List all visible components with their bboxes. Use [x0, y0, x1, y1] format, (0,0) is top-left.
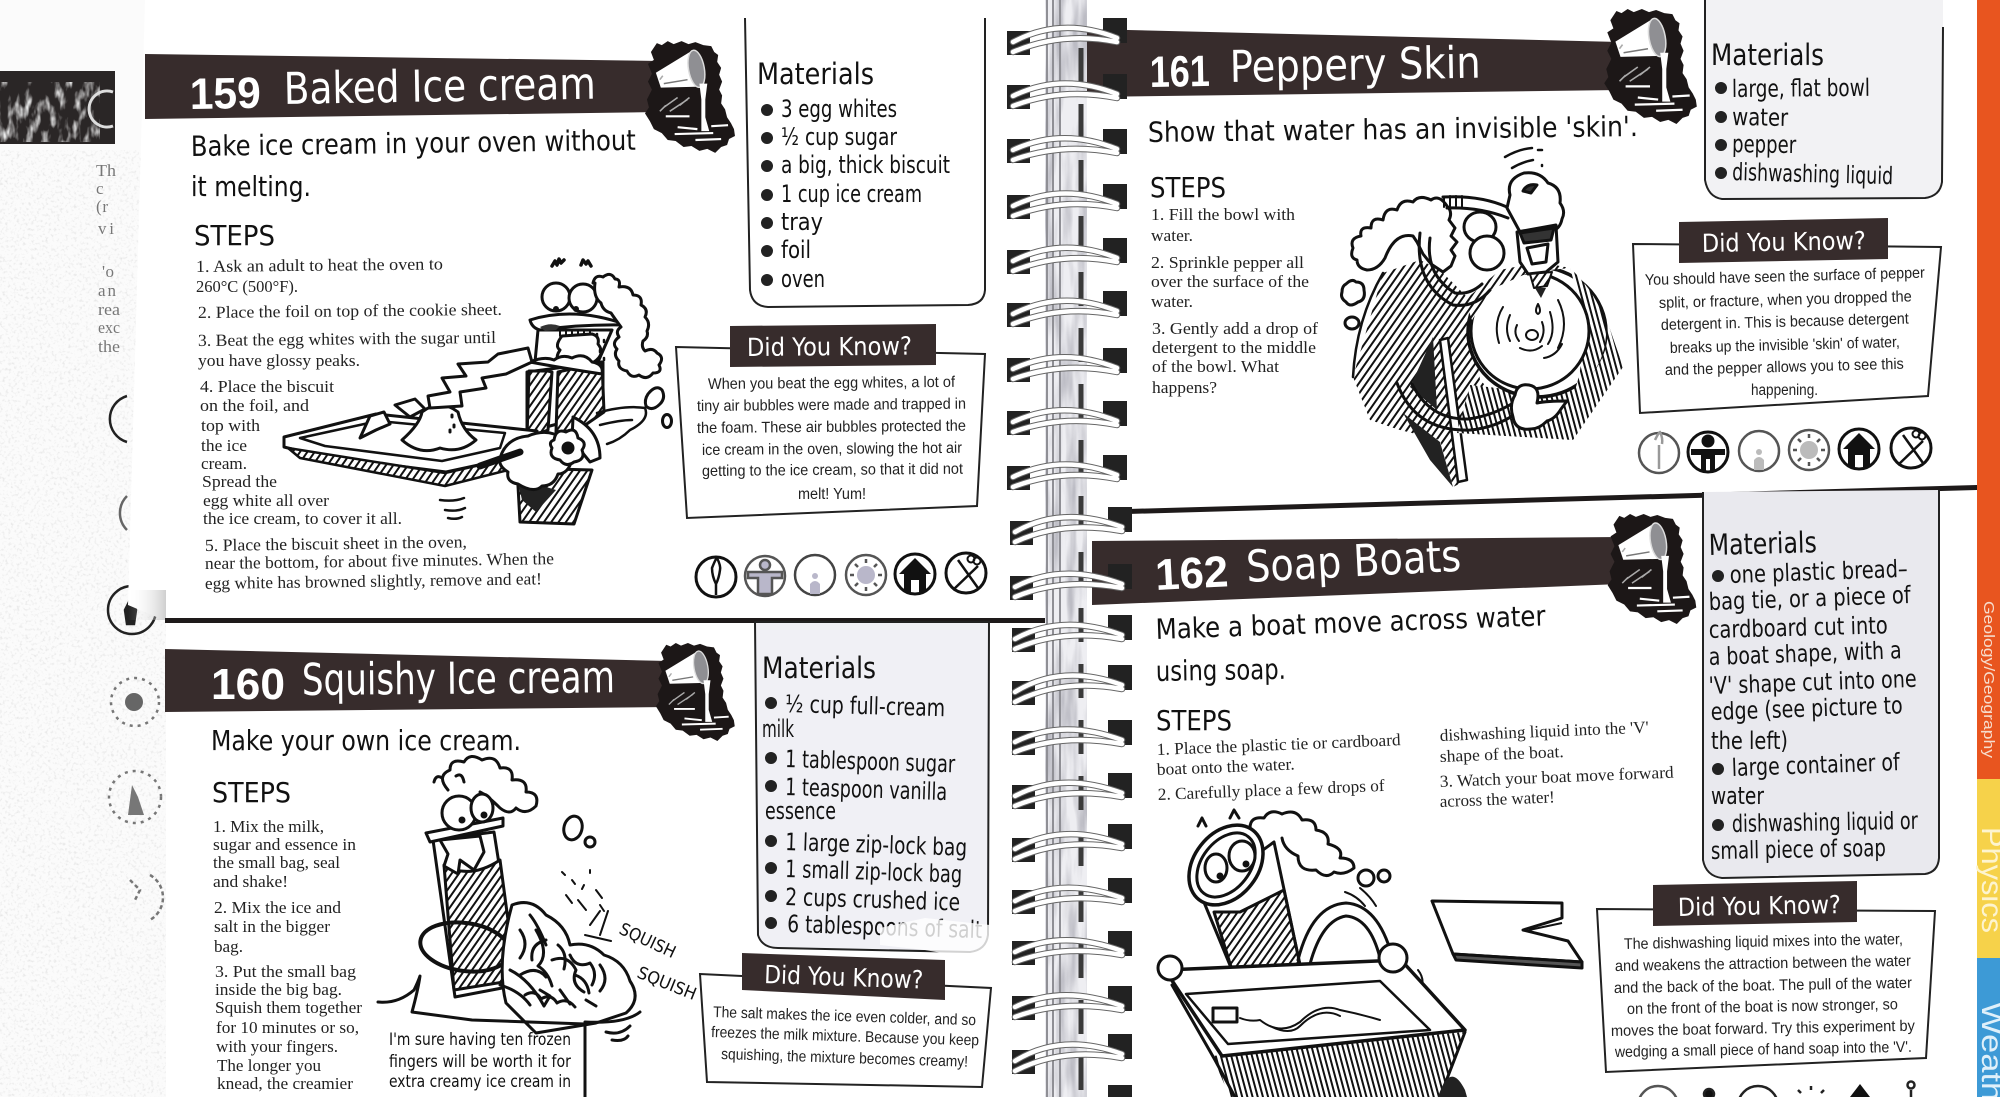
- did you know text 159: tiny air bubbles were made and trapped in: [697, 396, 966, 415]
- left page text fragments: an: [98, 281, 116, 300]
- bullets 161: [1715, 82, 1727, 179]
- materials list 162: 'V' shape cut into one: [1708, 665, 1917, 700]
- icon: sun: [846, 555, 886, 595]
- materials list 159: [781, 95, 950, 293]
- steps text 161: water.: [1151, 292, 1193, 311]
- materials list 159: ½ cup sugar: [781, 123, 897, 151]
- materials list 160: 2 cups crushed ice: [785, 883, 961, 916]
- title 162: Soap Boats: [1245, 531, 1462, 593]
- steps text 159: 2. Place the foil on top of the cookie sheet.: [198, 300, 502, 322]
- title 159: Baked Ice cream: [283, 59, 596, 115]
- steps text 162: across the water!: [1439, 787, 1555, 811]
- left page text fragments: Th: [96, 161, 117, 180]
- materials box 162: [1703, 490, 1939, 878]
- materials list 160: ½ cup full-cream: [785, 690, 946, 722]
- icon: match: [1639, 432, 1679, 473]
- foam cloud: [1352, 197, 1457, 272]
- icon: pouring bucket 161: [1604, 9, 1697, 124]
- title 161: Peppery Skin: [1229, 38, 1481, 93]
- icon: scissors: [1891, 428, 1931, 468]
- icon: match: [696, 557, 736, 597]
- materials list 162: [1708, 555, 1918, 865]
- right punch tabs: [1103, 18, 1132, 1097]
- steps text 161: 3. Gently add a drop of: [1152, 319, 1318, 338]
- illustration: cardboard boat piece: [1432, 901, 1582, 968]
- heading band 161: [1086, 29, 1620, 97]
- did you know text 162: on the front of the boat is now stronger, so: [1627, 996, 1898, 1018]
- icon: child: [745, 556, 785, 596]
- left page text fragments: 'o: [102, 262, 114, 281]
- illustration: test tube holding baked ice cream tray: [284, 259, 672, 524]
- steps text 160: inside the big bag.: [215, 980, 342, 999]
- did you know 162: [1597, 881, 1935, 1072]
- left page icon column: [108, 396, 163, 920]
- tube lower: [517, 468, 592, 524]
- title 160: [211, 652, 615, 709]
- materials list 161: pepper: [1732, 130, 1796, 159]
- steps text 162: 1. Place the plastic tie or cardboard: [1156, 730, 1401, 759]
- steps text 161: [1151, 205, 1318, 397]
- title 162: [1154, 531, 1462, 600]
- rim and eyes: [542, 283, 570, 311]
- did you know text 159: When you beat the egg whites, a lot of: [708, 374, 956, 393]
- bullets 162: [1712, 570, 1724, 831]
- ice cream: [402, 405, 476, 451]
- steps text 160: and shake!: [213, 872, 288, 891]
- materials list 162: large container of: [1731, 748, 1901, 782]
- colour edge tabs: [1975, 0, 2000, 1097]
- materials list 162: edge (see picture to: [1710, 691, 1903, 726]
- steps heading 160: STEPS: [212, 776, 291, 809]
- did you know text 161: [1645, 265, 1925, 399]
- did you know text 161: and the pepper allows you to see this: [1665, 356, 1904, 379]
- materials box 159: Materials: [757, 57, 874, 91]
- did you know 160: [700, 953, 991, 1087]
- left page text fragments: the: [98, 337, 120, 356]
- materials box 162: Materials: [1708, 525, 1817, 562]
- hand and flower cuff: [572, 417, 600, 462]
- materials list 162: dishwashing liquid or: [1732, 807, 1918, 838]
- steps text 161: water.: [1151, 226, 1193, 245]
- did you know text 161: split, or fracture, when you dropped the: [1659, 288, 1912, 312]
- did you know text 161: breaks up the invisible 'skin' of water,: [1670, 334, 1900, 357]
- materials list 160: 1 tablespoon sugar: [785, 745, 956, 778]
- steps text 159: 260°C (500°F).: [196, 277, 298, 296]
- did you know text 160: freezes the milk mixture. Because you keep: [711, 1024, 979, 1049]
- panel: experiment 159: [145, 18, 986, 597]
- tab label: geology: Geology/Geography: [1980, 601, 1997, 759]
- steps text 162: [1156, 718, 1674, 811]
- did you know 159: Did You Know?: [747, 332, 912, 362]
- steps text 159: 1. Ask an adult to heat the oven to: [196, 254, 443, 276]
- panel: experiment 161: [1086, 0, 1943, 487]
- title 159: [189, 59, 596, 119]
- icon: small person: [795, 555, 835, 595]
- left page text fragments: c: [96, 179, 104, 198]
- heading band 160: [165, 649, 668, 712]
- materials list 162: the left): [1711, 727, 1788, 755]
- bullets 160: [765, 697, 777, 929]
- steps text 161: happens?: [1152, 378, 1217, 397]
- bottle and fingers: [1507, 173, 1564, 232]
- materials list 162: small piece of soap: [1711, 834, 1886, 865]
- bullets 159: [761, 104, 773, 286]
- icon: pouring bucket 162: [1608, 514, 1696, 624]
- steps text 159: egg white all over: [203, 491, 329, 510]
- subtitle 159: it melting.: [191, 170, 311, 203]
- left punch tabs: [1007, 31, 1035, 1074]
- tube upper: [535, 330, 612, 362]
- did you know 161: Did You Know?: [1702, 226, 1866, 258]
- did you know text 160: squishing, the mixture becomes creamy!: [721, 1046, 968, 1071]
- materials box 159: [745, 18, 985, 307]
- materials list 162: a boat shape, with a: [1708, 636, 1902, 671]
- heading band 162: [1092, 537, 1620, 605]
- tray: [284, 414, 537, 472]
- steps text 159: the ice: [201, 436, 247, 455]
- steps text 159: [196, 254, 554, 593]
- safety icons 162: [1638, 1082, 1914, 1097]
- bowl: [1468, 267, 1606, 397]
- steps heading 159: STEPS: [194, 219, 275, 252]
- illustration: test tube with container of water: [1158, 810, 1465, 1097]
- materials list 162: cardboard cut into: [1708, 611, 1888, 644]
- materials box 160: Materials: [762, 651, 876, 685]
- title 161: [1149, 38, 1481, 97]
- safety icons 161: [1639, 428, 1931, 473]
- did you know text 160: [711, 1004, 979, 1071]
- icon: house: [1839, 429, 1879, 469]
- materials list 162: bag tie, or a piece of: [1708, 581, 1912, 616]
- steps text 159: 4. Place the biscuit: [200, 377, 334, 396]
- whipped peaks: [428, 348, 532, 408]
- materials list 159: a big, thick biscuit: [781, 151, 950, 179]
- materials list 160: 1 teaspoon vanilla: [785, 773, 948, 806]
- left page text fragments: rea: [98, 300, 120, 319]
- steps text 162: 2. Carefully place a few drops of: [1157, 776, 1385, 804]
- materials list 161: large, flat bowl: [1732, 74, 1870, 103]
- materials list 160: essence: [765, 797, 836, 825]
- did you know text 160: The salt makes the ice even colder, and so: [713, 1004, 976, 1029]
- icon: house: [895, 554, 935, 594]
- materials list 160: 1 small zip-lock bag: [785, 855, 963, 889]
- subtitle 159: [191, 124, 636, 203]
- panel: experiment 162: [1092, 490, 1939, 1097]
- speech caption: extra creamy ice cream in: [389, 1072, 571, 1092]
- did you know text 162: The dishwashing liquid mixes into the water,: [1624, 931, 1903, 953]
- heading band 159: [145, 54, 660, 119]
- wire rings: [1013, 28, 1122, 1071]
- steps text 159: 3. Beat the egg whites with the sugar until: [198, 328, 496, 350]
- did you know 161: [1633, 218, 1941, 413]
- materials list 162: one plastic bread–: [1729, 555, 1908, 589]
- foam: [593, 274, 662, 378]
- materials list 160: 6 tablespoons of salt: [787, 910, 983, 944]
- did you know text 159: melt! Yum!: [798, 486, 866, 503]
- glare over last line: [880, 918, 995, 958]
- materials box 160: [755, 622, 995, 958]
- left page text fragments: (r: [96, 197, 108, 216]
- sound effect labels: SQUISH: [634, 963, 699, 1005]
- steps text 159: near the bottom, for about five minutes. When the: [205, 549, 554, 573]
- speech caption: fingers will be worth it for: [389, 1052, 571, 1072]
- did you know text 159: getting to the ice cream, so that it did not: [702, 461, 964, 480]
- did you know text 159: the foam. These air bubbles protected the: [697, 418, 966, 437]
- icon: pouring bucket 159: [645, 41, 735, 153]
- left page text fragments: [96, 161, 120, 356]
- steps text 162: boat onto the water.: [1156, 754, 1295, 779]
- steps text 160: the small bag, seal: [213, 853, 340, 872]
- did you know text 162: moves the boat forward. Try this experiment by: [1611, 1018, 1915, 1040]
- did you know text 159: [697, 374, 966, 503]
- steps text 160: 1. Mix the milk,: [213, 817, 324, 836]
- did you know 159: [676, 324, 985, 518]
- subtitle 162: [1155, 599, 1546, 688]
- steps text 160: salt in the bigger: [214, 917, 330, 936]
- illustration: test tube dropping detergent into bowl: [1342, 148, 1623, 487]
- materials box 161: [1705, 0, 1943, 199]
- icon: child: [1688, 432, 1728, 472]
- left page dark banner fragment: [0, 71, 115, 144]
- illustration: test tube squishing a bag: [378, 756, 640, 1097]
- steps text 160: knead, the creamier: [217, 1074, 353, 1093]
- bubbles: [1342, 280, 1364, 305]
- steps text 161: 1. Fill the bowl with: [1151, 205, 1296, 224]
- steps text 162: shape of the boat.: [1439, 742, 1564, 766]
- materials list 162: water: [1711, 782, 1764, 810]
- icon: small person: [1739, 431, 1779, 471]
- did you know text 159: ice cream in the oven, slowing the hot air: [702, 440, 962, 459]
- did you know text 162: wedging a small piece of hand soap into the 'V'.: [1614, 1039, 1912, 1061]
- icon: scissors: [946, 553, 986, 593]
- left page text fragments: exc: [98, 318, 120, 337]
- steps text 159: top with: [201, 416, 261, 435]
- did you know text 161: happening.: [1751, 382, 1818, 399]
- steps text 159: the ice cream, to cover it all.: [203, 509, 402, 528]
- steps text 160: bag.: [214, 937, 243, 956]
- materials list 161: dishwashing liquid: [1732, 158, 1894, 190]
- steps text 160: The longer you: [217, 1056, 322, 1075]
- did you know text 162: [1611, 931, 1915, 1061]
- steps text 160: sugar and essence in: [213, 835, 357, 854]
- steps text 159: cream.: [201, 454, 247, 473]
- steps text 159: Spread the: [202, 472, 277, 491]
- subtitle 162: Make a boat move across water: [1155, 599, 1546, 646]
- icon: sun: [1789, 430, 1829, 470]
- subtitle 160: Make your own ice cream.: [211, 724, 521, 757]
- icon: pouring bucket 160: [656, 643, 735, 741]
- left neighbouring page: [0, 0, 168, 1097]
- materials list 159: oven: [781, 265, 825, 293]
- scribble shadow: [1438, 1077, 1467, 1097]
- steps heading 161: STEPS: [1150, 171, 1226, 204]
- materials list 160: [762, 690, 983, 944]
- materials list 160: milk: [762, 715, 794, 743]
- steps text 160: 3. Put the small bag: [215, 962, 357, 981]
- steps text 160: for 10 minutes or so,: [216, 1018, 359, 1037]
- materials list 160: 1 large zip-lock bag: [785, 828, 968, 862]
- materials list 159: 1 cup ice cream: [781, 180, 922, 208]
- steps text 160: with your fingers.: [216, 1037, 338, 1056]
- steps heading 162: STEPS: [1156, 704, 1232, 737]
- title 159: 159: [189, 69, 261, 119]
- safety icons 159: [696, 553, 986, 597]
- did you know text 161: detergent in. This is because detergent: [1661, 310, 1910, 334]
- speech caption: [389, 1030, 571, 1092]
- did you know text 162: and weakens the attraction between the water: [1615, 953, 1911, 975]
- title 162: 162: [1154, 547, 1229, 600]
- did you know text 161: You should have seen the surface of pepper: [1645, 265, 1925, 289]
- title 161: 161: [1149, 47, 1210, 97]
- spine strip: [1045, 0, 1087, 1097]
- speech caption: I'm sure having ten frozen: [389, 1030, 571, 1050]
- steps text 161: of the bowl. What: [1152, 357, 1279, 376]
- did you know text 162: and the back of the boat. The pull of the water: [1614, 975, 1912, 997]
- panel: experiment 160: [165, 622, 995, 1097]
- divider rule 161/162: [1128, 485, 1977, 514]
- steps text 160: Squish them together: [215, 998, 362, 1017]
- materials list 159: 3 egg whites: [781, 95, 897, 123]
- steps text 160: [213, 817, 362, 1093]
- body hatching: [1353, 260, 1520, 487]
- steps text 161: over the surface of the: [1151, 272, 1309, 291]
- eyes: [1464, 212, 1496, 242]
- steps text 160: 2. Mix the ice and: [214, 898, 342, 917]
- steps text 161: 2. Sprinkle pepper all: [1151, 253, 1304, 272]
- page edge shadow: [128, 590, 166, 620]
- materials list 161: [1732, 74, 1894, 190]
- sound effect labels: [616, 919, 699, 1005]
- left page text fragments: vi: [98, 219, 114, 238]
- divider rule 159/160: [165, 618, 1053, 623]
- title 160: Squishy Ice cream: [302, 652, 615, 706]
- page 1 white sheet: [128, 0, 1050, 1097]
- steps text 162: 3. Watch your boat move forward: [1439, 763, 1674, 791]
- materials list 159: tray: [781, 208, 823, 236]
- subtitle 161: Show that water has an invisible 'skin'.: [1148, 110, 1638, 149]
- steps text 159: on the foil, and: [200, 396, 310, 415]
- materials list 159: foil: [781, 236, 811, 264]
- steps text 159: 5. Place the biscuit sheet in the oven,: [205, 532, 467, 555]
- did you know 162: Did You Know?: [1678, 890, 1841, 922]
- did you know 160: Did You Know?: [764, 960, 924, 995]
- spiral binding: [1007, 0, 1132, 1097]
- steps text 161: detergent to the middle: [1152, 338, 1316, 357]
- upper arm: [1419, 233, 1490, 305]
- sound effect labels: SQUISH: [616, 919, 679, 963]
- steps text 159: egg white has browned slightly, remove and eat!: [205, 569, 542, 593]
- steps text 159: you have glossy peaks.: [198, 351, 360, 370]
- title 160: 160: [211, 660, 285, 709]
- subtitle 162: using soap.: [1156, 653, 1286, 688]
- steps text 162: dishwashing liquid into the 'V': [1439, 718, 1649, 745]
- hatched liquid box: [527, 362, 603, 432]
- materials box 161: Materials: [1711, 38, 1824, 72]
- lower arm and hand: [1397, 383, 1517, 430]
- materials list 161: water: [1732, 103, 1788, 132]
- subtitle 159: Bake ice cream in your oven without: [191, 124, 636, 163]
